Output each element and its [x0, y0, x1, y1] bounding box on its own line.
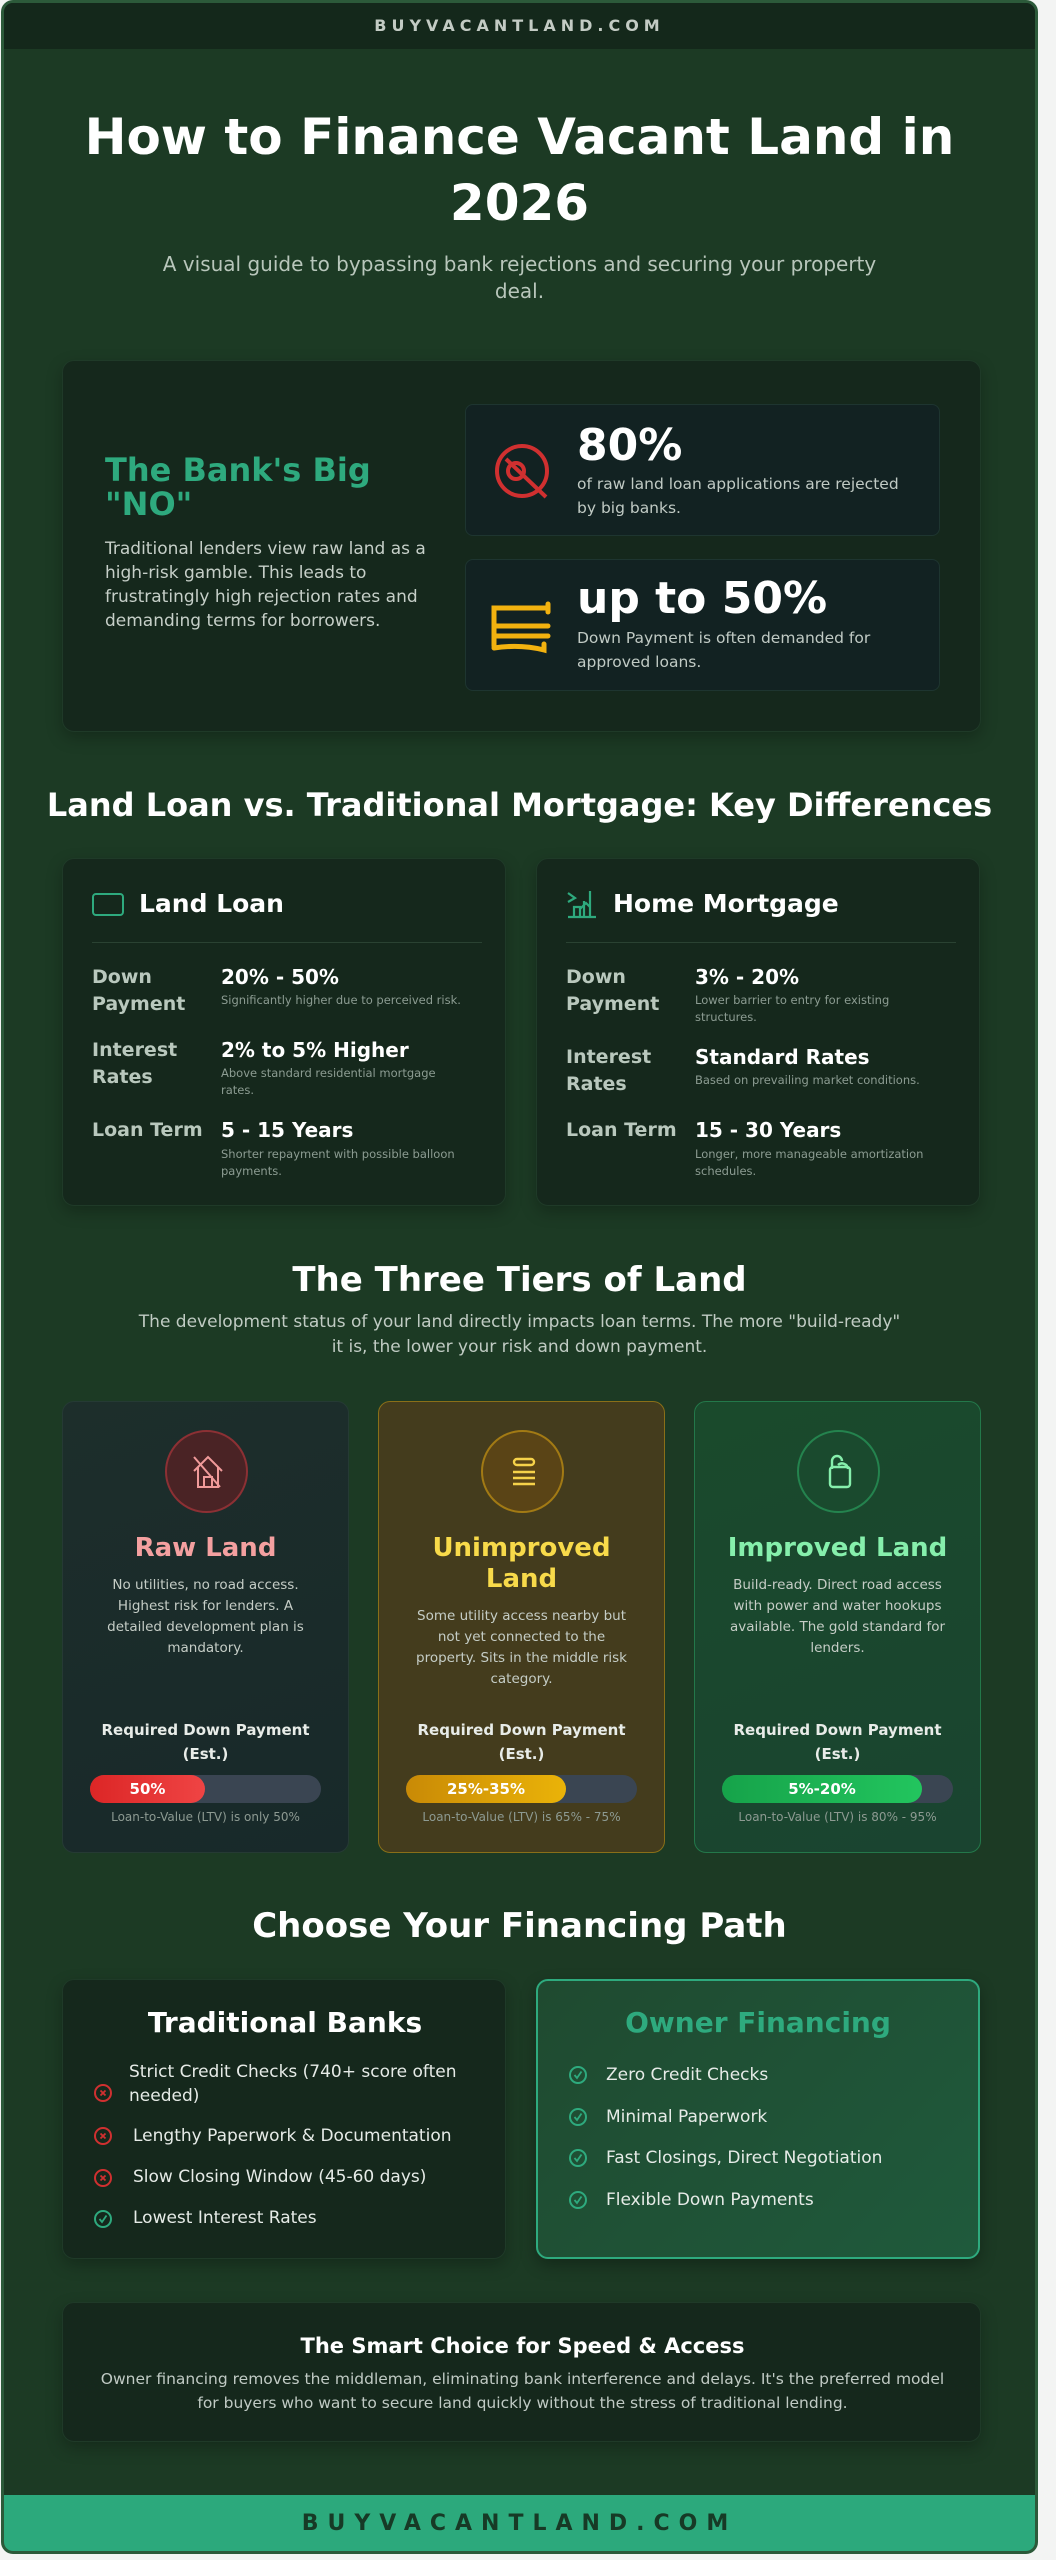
requirement: Required Down Payment (Est.): [417, 1721, 626, 1763]
row: term: [566, 1118, 923, 1178]
stat value: up to 50%: [577, 573, 827, 624]
row: interest: [566, 1045, 920, 1095]
list: Flexible Down Payments: [606, 2190, 814, 2210]
icon: house chart: [567, 891, 596, 918]
heading: financing path: Choose Your Financing Path: [252, 1906, 787, 1946]
tier: improved: Loan-to-Value (LTV) is 80% - 95%: [738, 1810, 937, 1824]
row: term: [92, 1118, 455, 1178]
bar: 50%: 50%: [130, 1780, 165, 1798]
card title: Owner Financing: [625, 2006, 891, 2039]
bar: 5-20%: [722, 1775, 953, 1803]
row: interest: Interest Rates: [566, 1046, 651, 1095]
row: term: Loan Term: [92, 1119, 203, 1141]
stat: 50%: [465, 559, 940, 691]
row: down payment: [566, 965, 889, 1024]
row: term: Shorter repayment with possible balloon payments.: [221, 1147, 455, 1178]
row: down payment: Down Payment: [566, 966, 659, 1015]
row: interest: [92, 1038, 436, 1097]
bar: 50%: [90, 1775, 321, 1803]
text: tiers intro: [138, 1312, 900, 1357]
list: [94, 2062, 456, 2228]
row: term: Loan Term: [566, 1119, 677, 1141]
bar: 25-35%: [406, 1775, 637, 1803]
bar: 5-20%: 5%-20%: [788, 1780, 856, 1798]
stat: 50%: Down Payment is often demanded for approved loans.: [577, 629, 870, 671]
panel: land loan: [62, 858, 506, 1206]
list: Lowest Interest Rates: [133, 2208, 317, 2228]
icon: unimproved: [481, 1430, 564, 1513]
row: term: Longer, more manageable amortization schedules.: [695, 1147, 923, 1178]
list: Slow Closing Window (45-60 days): [133, 2167, 426, 2187]
panel: owner financing: [536, 1979, 980, 2259]
text: lenders: Traditional lenders view raw land as a high-risk gamble. This leads to frustratingly high rejection rates and demanding terms for borrowers.: [105, 539, 426, 631]
panel: bank's big no: [62, 360, 981, 732]
tier description: Build-ready. Direct road access with power and water hookups available. The gold standard for lenders.: [730, 1577, 945, 1656]
list: Strict Credit Checks (740+ score often needed): [129, 2062, 456, 2106]
row: down payment: [92, 965, 461, 1015]
icon: money: [492, 602, 550, 654]
footer: [4, 2495, 1035, 2555]
list: Zero Credit Checks: [606, 2065, 768, 2085]
heading: key differences: Land Loan vs. Traditional Mortgage: Key Differences: [47, 786, 992, 824]
stat: 80%: [465, 404, 940, 536]
row: interest: Above standard residential mortgage rates.: [221, 1066, 436, 1097]
icon: improved: [797, 1430, 880, 1513]
footer: BUYVACANTLAND.COM: [302, 2511, 737, 2536]
tier description: No utilities, no road access. Highest risk for lenders. A detailed development plan is mandatory.: [107, 1577, 304, 1656]
requirement: Required Down Payment (Est.): [101, 1721, 310, 1763]
text: tiers intro: The development status of your land directly impacts loan terms. The more "build-ready": [139, 1312, 900, 1332]
tier title: Raw Land: [135, 1533, 276, 1563]
subtitle: A visual guide to bypassing bank rejections and securing your property deal.: [163, 252, 876, 303]
tier description: Some utility access nearby but not yet connected to the property. Sits in the middle risk category.: [416, 1608, 627, 1687]
row: interest: Standard Rates: [695, 1045, 870, 1069]
requirement: Required Down Payment (Est.): [733, 1721, 942, 1763]
row: down payment: Significantly higher due to perceived risk.: [221, 993, 461, 1007]
stat value: 80%: [577, 420, 682, 471]
row: down payment: 3% - 20%: [695, 965, 799, 989]
tier: improved: [694, 1401, 981, 1853]
top bar: BUYVACANTLAND.COM: [374, 16, 665, 35]
row: down payment: 20% - 50%: [221, 965, 339, 989]
top bar: [4, 3, 1035, 49]
stat: 80%: of raw land loan applications are rejected by big banks.: [577, 475, 899, 517]
icon: land: [92, 893, 124, 916]
heading: smart choice: The Smart Choice for Speed & Access: [301, 2334, 744, 2358]
card title: Land Loan: [139, 889, 284, 918]
tier: unimproved: Loan-to-Value (LTV) is 65% - 75%: [422, 1810, 621, 1824]
panel: smart choice: [62, 2302, 981, 2442]
title: How to Finance Vacant Land in 2026: [85, 108, 954, 232]
list: Lengthy Paperwork & Documentation: [133, 2126, 452, 2146]
list: [569, 2065, 882, 2210]
panel: traditional banks: [62, 1979, 506, 2259]
list: Fast Closings, Direct Negotiation: [606, 2148, 882, 2168]
row: interest: Based on prevailing market conditions.: [695, 1073, 920, 1087]
bar: 25-35%: 25%-35%: [447, 1780, 525, 1798]
row: term: 5 - 15 Years: [221, 1118, 353, 1142]
text: tiers intro: it is, the lower your risk and down payment.: [332, 1337, 707, 1357]
panel: home mortgage: [536, 858, 980, 1206]
icon: raw land: [165, 1430, 248, 1513]
row: down payment: Down Payment: [92, 966, 185, 1015]
card title: Traditional Banks: [148, 2006, 422, 2039]
row: down payment: Lower barrier to entry for existing structures.: [695, 993, 889, 1024]
list: Minimal Paperwork: [606, 2107, 767, 2127]
row: interest: Interest Rates: [92, 1039, 177, 1088]
icon: rejected: [495, 444, 549, 498]
card title: Home Mortgage: [613, 889, 839, 918]
heading: bank's big no: The Bank's Big "NO": [105, 451, 371, 523]
heading: three tiers: The Three Tiers of Land: [292, 1260, 747, 1300]
text: smart choice: Owner financing removes the middleman, eliminating bank interference and delays. It's the preferred model for buyers who want to secure land quickly without the stress of traditional lending.: [101, 2370, 944, 2412]
tier: raw land: Loan-to-Value (LTV) is only 50%: [111, 1810, 300, 1824]
row: interest: 2% to 5% Higher: [221, 1038, 409, 1062]
row: term: 15 - 30 Years: [695, 1118, 841, 1142]
tier: unimproved: [378, 1401, 665, 1853]
tier: raw land: [62, 1401, 349, 1853]
tier title: Improved Land: [728, 1533, 947, 1563]
tier title: Unimproved Land: [432, 1533, 611, 1594]
